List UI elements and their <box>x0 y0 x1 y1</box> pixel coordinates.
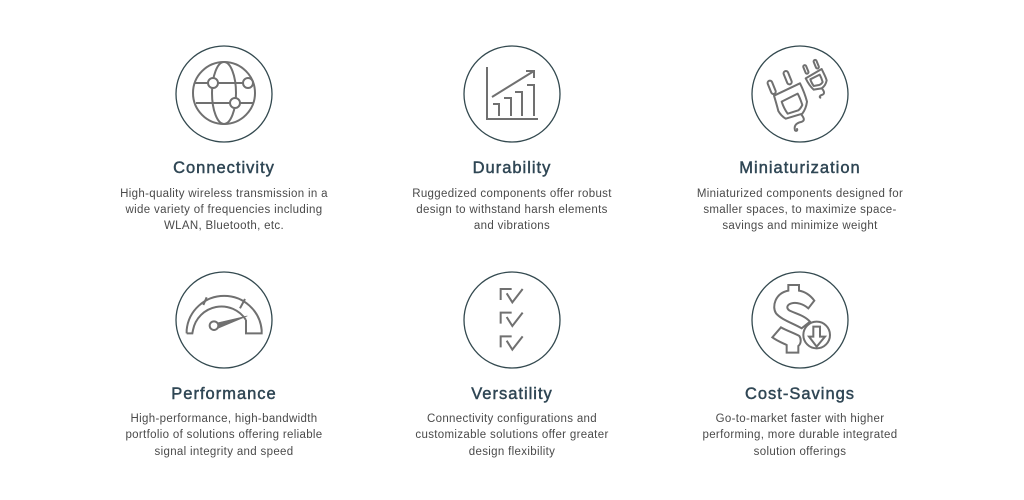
panel: durability <box>412 45 612 232</box>
text: miniaturization description: savings and minimize weight <box>722 220 878 232</box>
text: versatility description <box>415 412 609 458</box>
heading: Durability: Durability <box>473 159 551 177</box>
heading: Versatility: Versatility <box>471 385 553 403</box>
icon: speedometer gauge <box>175 271 273 369</box>
text: cost-savings description: Go-to-market faster with higher <box>716 412 884 424</box>
text: cost-savings description: solution offerings <box>754 446 846 458</box>
text: miniaturization description <box>697 188 903 232</box>
heading: Connectivity: Connectivity <box>173 159 275 177</box>
text: versatility description: Connectivity configurations and <box>427 412 597 424</box>
panel: miniaturization <box>697 45 903 232</box>
panel: connectivity <box>120 45 328 232</box>
icon: checklist <box>463 271 561 369</box>
text: performance description: portfolio of solutions offering reliable <box>125 429 323 441</box>
text: connectivity description: wide variety of frequencies including <box>126 204 322 216</box>
text: performance description: signal integrity and speed <box>154 446 294 458</box>
panel: cost-savings <box>702 271 898 458</box>
panel: performance <box>125 271 323 458</box>
text: connectivity description: WLAN, Bluetooth, etc. <box>164 220 284 232</box>
text: cost-savings description: performing, more durable integrated <box>702 429 898 441</box>
text: performance description <box>125 412 323 458</box>
text: versatility description: customizable solutions offer greater <box>415 429 609 441</box>
text: connectivity description: High-quality wireless transmission in a <box>120 188 328 200</box>
text: performance description: High-performance, high-bandwidth <box>130 412 318 424</box>
icon: two plugs <box>751 45 849 143</box>
text: miniaturization description: smaller spaces, to maximize space- <box>703 204 897 216</box>
heading: Miniaturization: Miniaturization <box>739 159 861 177</box>
heading: Performance: Performance <box>171 385 277 403</box>
panel: versatility <box>415 271 609 458</box>
text: durability description: and vibrations <box>474 220 550 232</box>
icon: dollar sign with down arrow <box>751 271 849 369</box>
text: cost-savings description <box>702 412 898 458</box>
text: versatility description: design flexibility <box>469 446 555 458</box>
text: durability description: Ruggedized components offer robust <box>412 188 612 200</box>
icon: globe network <box>175 45 273 143</box>
icon: rising bar chart <box>463 45 561 143</box>
text: miniaturization description: Miniaturized components designed for <box>697 188 903 200</box>
heading: Cost-Savings: Cost-Savings <box>745 385 855 403</box>
text: durability description <box>412 188 612 232</box>
text: connectivity description <box>120 188 328 232</box>
text: durability description: design to withstand harsh elements <box>416 204 608 216</box>
